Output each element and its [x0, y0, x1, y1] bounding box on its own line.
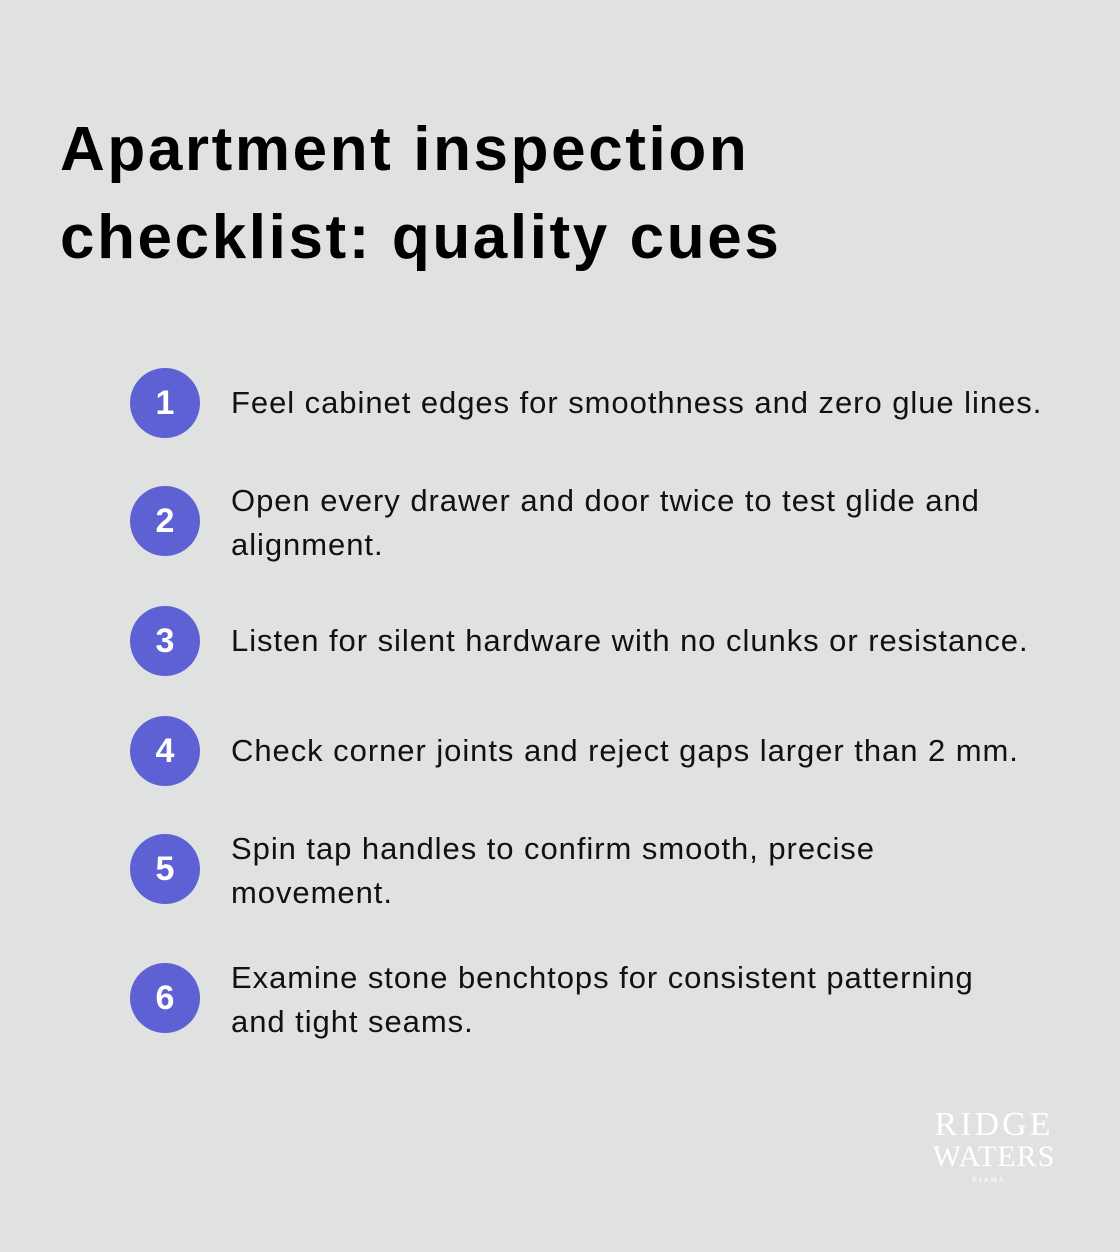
- item 4: 4: [156, 732, 174, 770]
- item 4: [130, 716, 1019, 786]
- title: [60, 115, 781, 272]
- item 4: Check corner joints and reject gaps larger than 2 mm.: [231, 733, 1019, 768]
- logo: [932, 1106, 1055, 1184]
- item 1: [130, 368, 1042, 438]
- item 5: [130, 831, 875, 910]
- item 2: [130, 483, 980, 562]
- item 1: 1: [156, 384, 174, 422]
- item 5: Spin tap handles to confirm smooth, precise: [231, 831, 875, 866]
- item 2: 2: [156, 502, 174, 540]
- item 6: 6: [156, 979, 174, 1017]
- item 5: movement.: [231, 875, 393, 910]
- item 2: alignment.: [231, 527, 384, 562]
- item 3: [130, 606, 1029, 676]
- item 6: [130, 960, 974, 1039]
- item 3: 3: [156, 622, 174, 660]
- item 3: Listen for silent hardware with no clunks or resistance.: [231, 623, 1029, 658]
- title: checklist: quality cues: [60, 203, 781, 272]
- item 6: Examine stone benchtops for consistent patterning: [231, 960, 974, 995]
- title: Apartment inspection: [60, 115, 749, 184]
- item 2: Open every drawer and door twice to test glide and: [231, 483, 980, 518]
- item 6: and tight seams.: [231, 1004, 474, 1039]
- logo: WATERS: [933, 1140, 1055, 1173]
- logo: KIAMA: [972, 1176, 1006, 1184]
- item 5: 5: [156, 850, 174, 888]
- logo: RIDGE: [935, 1106, 1053, 1143]
- item 1: Feel cabinet edges for smoothness and zero glue lines.: [231, 385, 1042, 420]
